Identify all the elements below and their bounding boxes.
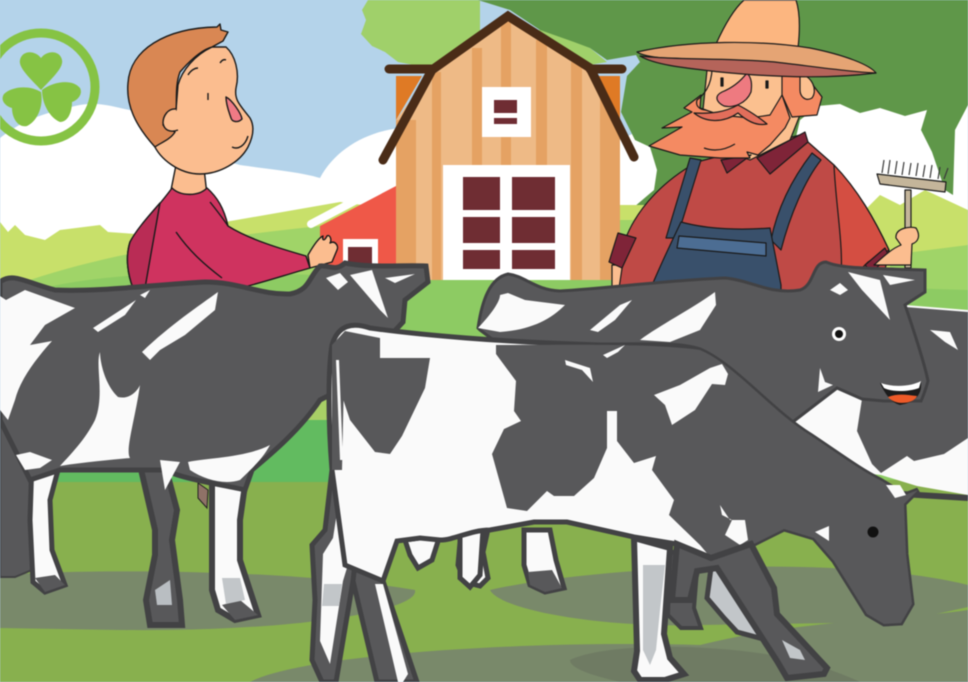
front cow udder <box>405 535 440 568</box>
left cow body <box>0 263 428 490</box>
farmer hand and rake <box>874 160 948 268</box>
back cow mouth <box>880 382 921 405</box>
left cow <box>0 263 428 625</box>
boy shirt <box>127 188 310 288</box>
farmer right cuff <box>865 248 889 272</box>
barn orange eaves <box>396 76 422 120</box>
boy face <box>153 47 253 174</box>
farmer overalls <box>648 153 821 295</box>
clover logo <box>0 33 95 141</box>
barn wall stripes <box>396 22 620 280</box>
front cow first foreleg <box>634 538 684 680</box>
hills <box>0 190 968 480</box>
farmer collar <box>721 155 751 173</box>
barn roof <box>383 16 634 160</box>
farmer hat brim <box>637 42 876 73</box>
back cow white patches <box>478 272 915 392</box>
front cow far hind leg <box>347 555 417 682</box>
third cow far right <box>794 305 968 498</box>
left cow udder <box>198 483 208 508</box>
grazing head far left <box>0 420 35 577</box>
front cow far foreleg <box>707 560 785 640</box>
farmer beard <box>649 95 790 158</box>
dark green tree canopy <box>478 0 968 207</box>
farmer head <box>700 60 800 160</box>
front cow <box>312 325 918 682</box>
front cow dark markings <box>332 331 918 624</box>
boy neck <box>170 165 207 195</box>
barn door <box>443 165 570 280</box>
front cow second foreleg <box>672 544 827 678</box>
left cow white patches <box>0 270 415 490</box>
farmer hat crown <box>716 0 799 48</box>
front cow eye <box>868 526 878 538</box>
front cow body <box>329 325 918 624</box>
farmer sleeve arm <box>612 265 622 290</box>
front cow near hind leg <box>312 455 362 682</box>
farmer hair and ear <box>782 60 822 117</box>
left cow near foreleg <box>140 465 182 625</box>
left cow far foreleg <box>30 460 65 592</box>
front cow tail highlight <box>336 360 343 460</box>
barn <box>383 16 634 280</box>
red shed <box>311 178 398 285</box>
farmer <box>609 0 948 295</box>
front cow third foreleg <box>668 550 701 628</box>
clouds <box>0 95 968 240</box>
boy ear <box>163 109 178 131</box>
left cow hind leg <box>212 480 258 620</box>
back cow eye <box>832 327 846 341</box>
farmer left cuff <box>609 233 636 268</box>
light green tree <box>361 0 607 70</box>
back cow body <box>478 262 928 440</box>
boy <box>127 24 338 288</box>
boy hand <box>308 236 338 268</box>
barn window <box>482 87 531 137</box>
farmer shirt <box>618 135 889 295</box>
farmer moustache <box>694 105 767 125</box>
boy mouth <box>226 97 242 122</box>
back right cow <box>458 262 928 592</box>
boy hair <box>128 24 228 147</box>
front cow white spots <box>565 345 906 545</box>
back cow legs <box>458 520 490 586</box>
grass field <box>0 392 968 682</box>
farmer nose <box>717 73 752 106</box>
